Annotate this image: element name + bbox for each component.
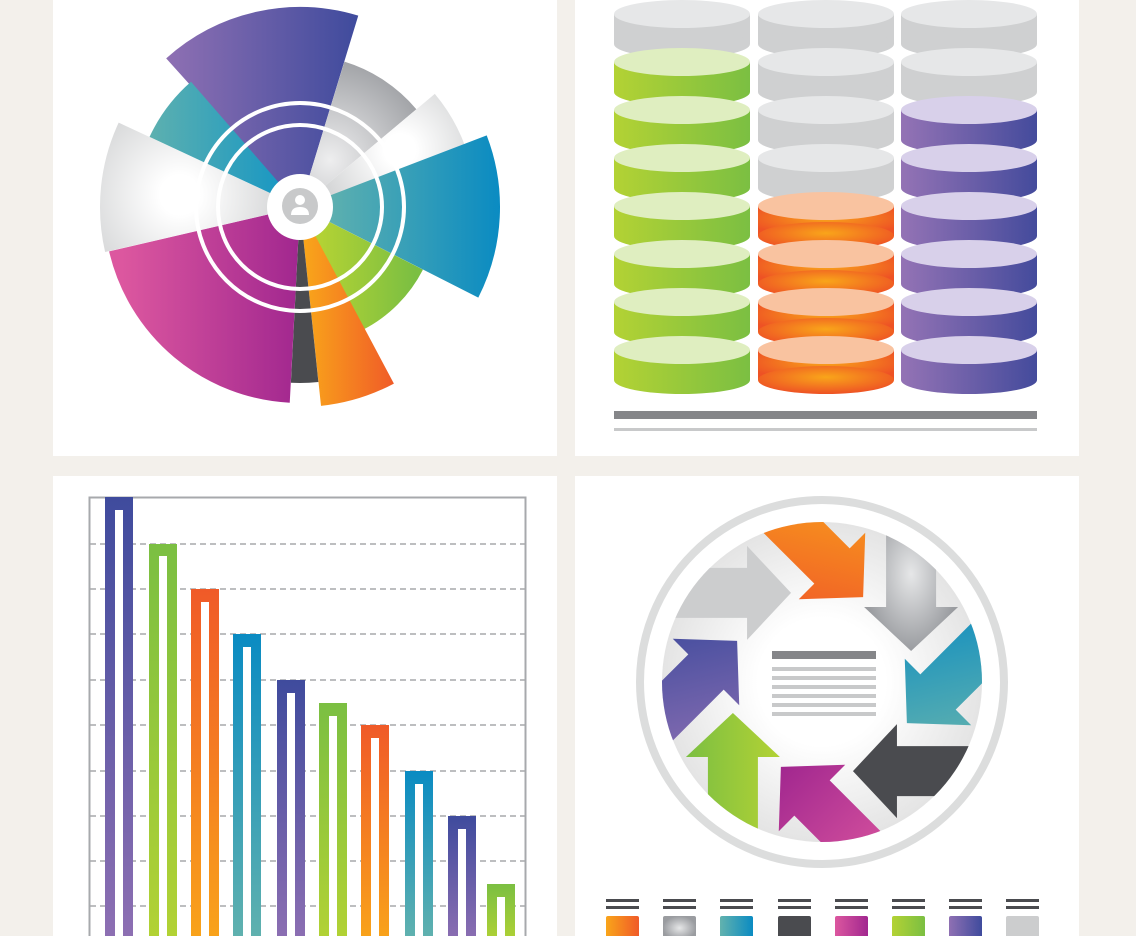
panel: stacked cylinders [575, 0, 1079, 456]
legend [606, 899, 1039, 936]
arrows cycle [662, 522, 982, 842]
cylinder column 3 [901, 0, 1037, 394]
panel: radial pie chart [53, 0, 557, 456]
pie sectors [90, 0, 510, 420]
cylinder column 1 [614, 0, 750, 394]
bars [105, 497, 515, 936]
icon: person [267, 174, 333, 240]
panel: bar chart [53, 476, 557, 936]
cylinder column 2 [758, 0, 894, 394]
text placeholder lines [772, 651, 876, 716]
panel: circular arrows [575, 455, 1079, 936]
